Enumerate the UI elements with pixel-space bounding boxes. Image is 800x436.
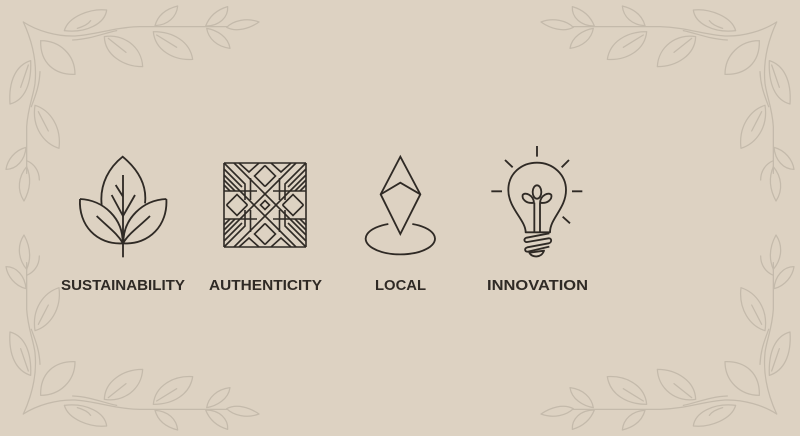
vine corner: bottom left (6, 235, 259, 430)
icon: three leaves (80, 157, 166, 257)
vine corner: top left (6, 6, 259, 201)
label: sustainability: SUSTAINABILITY (61, 278, 185, 294)
label: local: LOCAL (375, 278, 426, 294)
vine corner: bottom right (541, 235, 794, 430)
label: authenticity: AUTHENTICITY (209, 278, 322, 294)
label: innovation: INNOVATION (487, 278, 588, 294)
vine corner: top right (541, 6, 794, 201)
icon: map location pin (366, 157, 435, 254)
icon: geometric pattern (224, 163, 306, 247)
icon: light bulb (491, 146, 582, 256)
